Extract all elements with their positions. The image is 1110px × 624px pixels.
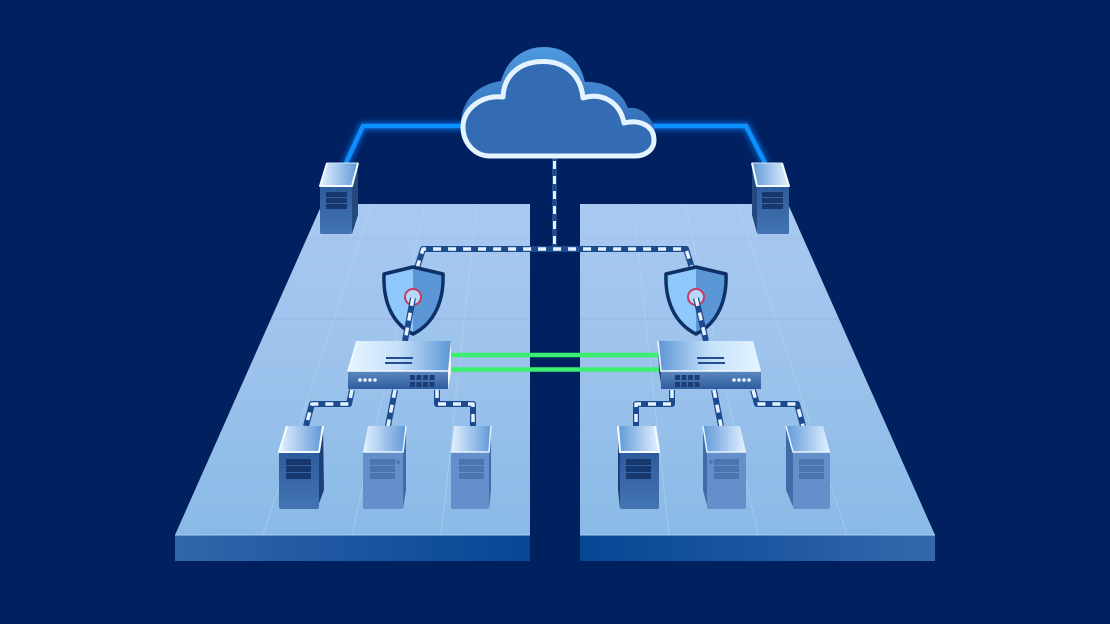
icon: cloud bbox=[461, 47, 656, 156]
icon: right server 2 bbox=[703, 426, 746, 509]
arrow: dashed links right switch to servers bbox=[636, 390, 803, 426]
icon: right firewall shield bbox=[666, 267, 726, 334]
icon: top left gateway server bbox=[320, 163, 358, 234]
icon: left firewall shield bbox=[384, 267, 443, 334]
panel: left floor platform bbox=[175, 204, 530, 561]
arrow: dashed link cloud to firewalls bbox=[417, 158, 692, 268]
arrow: blue link right cloud to gateway bbox=[650, 126, 765, 163]
arrow: green links between switches bbox=[450, 355, 660, 370]
icon: left server 3 bbox=[451, 426, 491, 509]
icon: left network switch bbox=[348, 341, 451, 389]
arrow: dashed links shields to switches bbox=[405, 298, 706, 341]
arrow: blue link left cloud to gateway bbox=[346, 126, 465, 163]
icon: right server 3 bbox=[786, 426, 830, 509]
icon: right network switch bbox=[658, 341, 761, 389]
panel: right floor platform bbox=[580, 204, 935, 561]
icon: left server 2 bbox=[363, 426, 406, 509]
icon: top right gateway server bbox=[752, 163, 789, 234]
icon: left server 1 bbox=[279, 426, 324, 509]
arrow: dashed links left switch to servers bbox=[306, 390, 473, 426]
icon: right server 1 bbox=[618, 426, 659, 509]
